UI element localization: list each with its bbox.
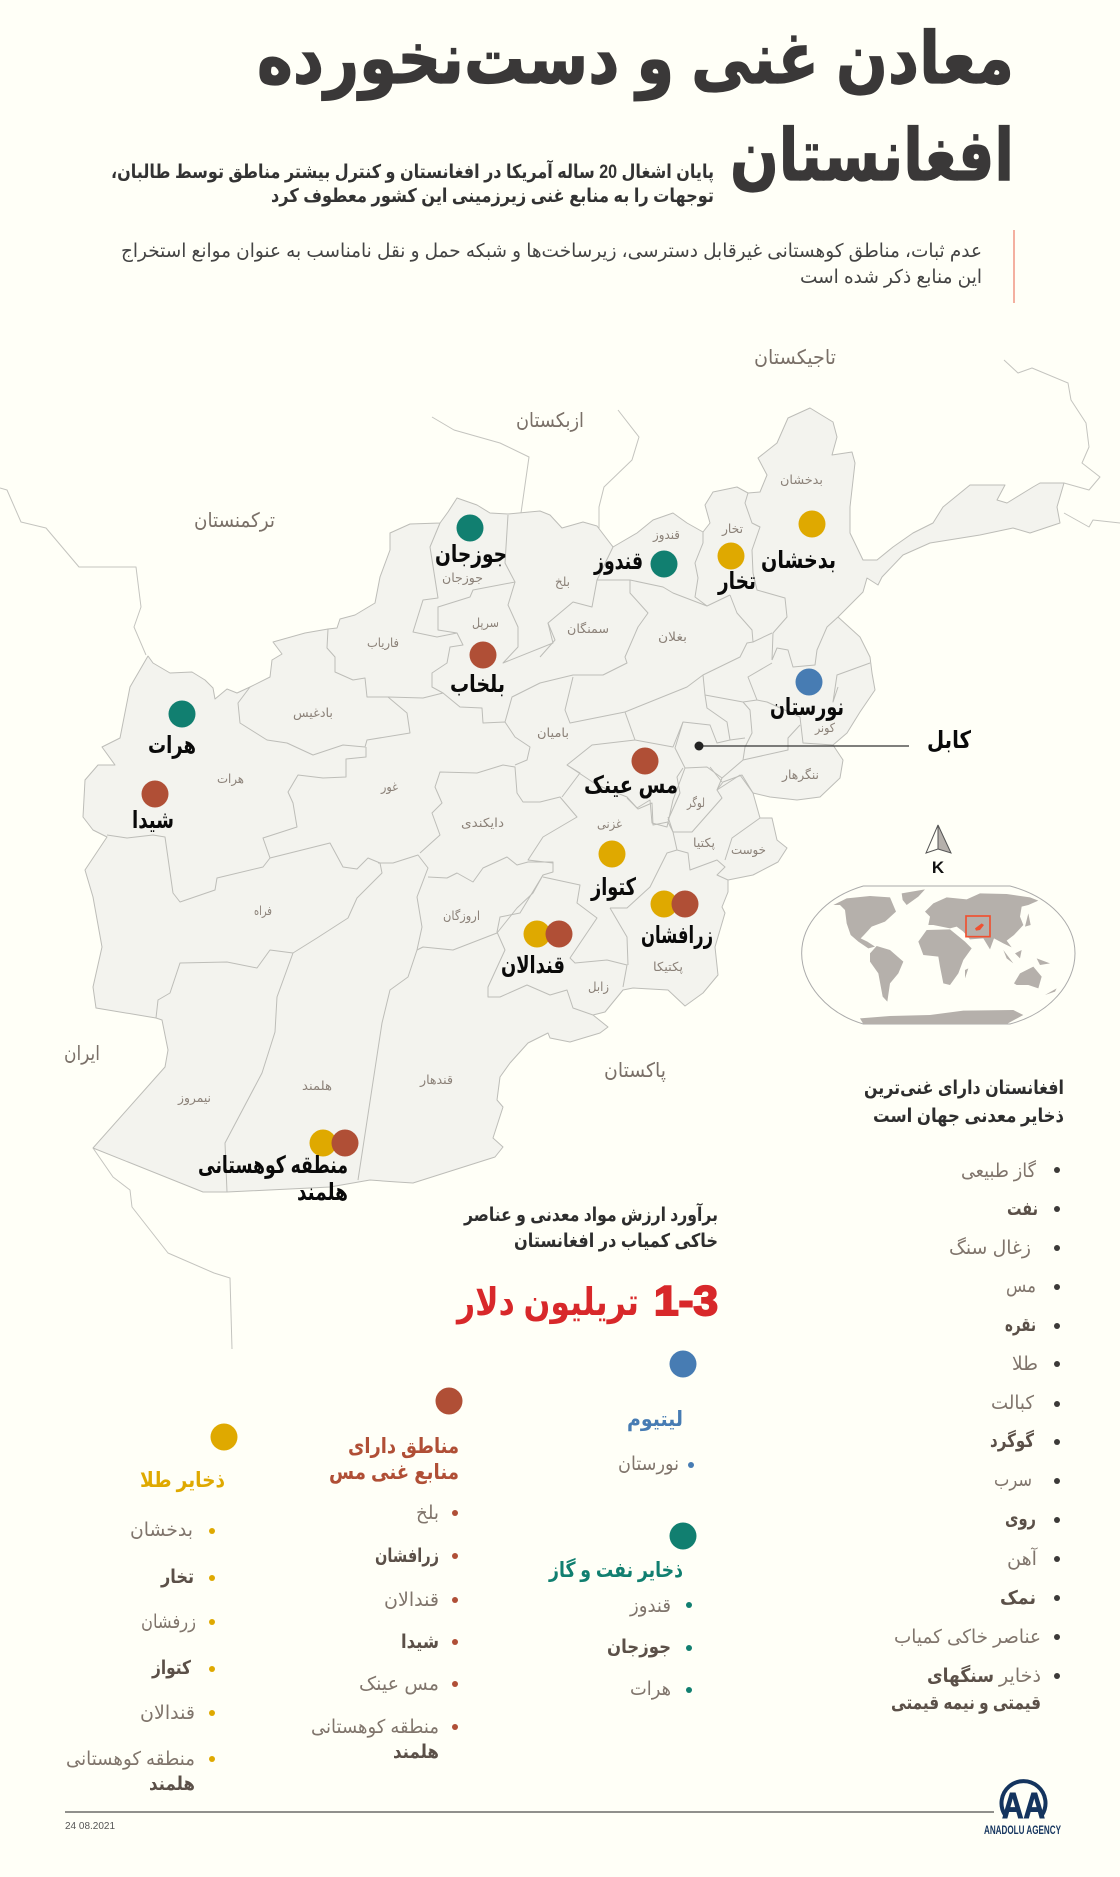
logo: Anadolu Agency bbox=[984, 1781, 1061, 1837]
icon: north arrow bbox=[926, 825, 951, 877]
marker: Helmand mountain area gold and copper: منطقه کوهستانی bbox=[198, 1152, 348, 1179]
map: province labels: تخار bbox=[721, 522, 743, 537]
marker: Balkhab copper bbox=[450, 642, 505, 698]
list: minerals: قیمتی و نیمه قیمتی bbox=[891, 1693, 1041, 1714]
marker: Helmand mountain area gold and copper: هلمند bbox=[297, 1179, 348, 1206]
map: province labels: هلمند bbox=[302, 1079, 332, 1093]
map: province labels: سمنگان bbox=[567, 621, 609, 636]
subtitle: پایان اشغال 20 ساله آمریکا در افغانستان و کنترل بیشتر مناطق توسط طالبان، bbox=[111, 159, 714, 183]
legend: copper regions: منطقه کوهستانی bbox=[311, 1717, 439, 1738]
intro text block: این منابع ذکر شده است bbox=[800, 267, 982, 288]
legend: lithium bbox=[618, 1350, 696, 1475]
marker: Katawaz gold bbox=[590, 840, 636, 901]
marker: Mes Aynak copper: مس عینک bbox=[584, 772, 678, 799]
legend: gold reserves: ذخایر طلا bbox=[140, 1469, 225, 1492]
list heading: richest reserves: افغانستان دارای غنی‌ترین bbox=[864, 1078, 1064, 1099]
list: minerals: نقره bbox=[1005, 1315, 1036, 1336]
title: افغانستان bbox=[730, 116, 1014, 196]
marker: Kunduz oil and gas: قندوز bbox=[593, 548, 643, 575]
world locator map bbox=[802, 886, 1075, 1024]
callout: estimated value bbox=[455, 1202, 718, 1324]
list: minerals: گوگرد bbox=[990, 1429, 1035, 1452]
list: minerals: گاز طبیعی bbox=[961, 1159, 1037, 1182]
map: Afghanistan outline bbox=[83, 408, 1064, 1192]
legend: gold reserves bbox=[66, 1424, 238, 1795]
map: province labels: جوزجان bbox=[442, 571, 483, 586]
legend: gold reserves: تخار bbox=[160, 1567, 194, 1588]
marker: Nuristan lithium: نورستان bbox=[770, 694, 844, 721]
marker: Helmand mountain area gold and copper bbox=[198, 1130, 358, 1206]
map: province labels: غور bbox=[380, 780, 398, 795]
title bbox=[257, 19, 1014, 196]
marker: Shida copper bbox=[132, 780, 174, 834]
marker: Balkhab copper: بلخاب bbox=[450, 671, 505, 698]
legend: oil and gas reserves: جوزجان bbox=[607, 1637, 671, 1658]
marker: Jowzjan oil and gas: جوزجان bbox=[435, 541, 507, 568]
map: neighbouring country borders bbox=[0, 360, 1120, 1349]
intro text block: عدم ثبات، مناطق کوهستانی غیرقابل دسترسی، زیرساخت‌ها و شبکه حمل و نقل نامناسب به عنوان موانع استخراج bbox=[121, 241, 982, 262]
map: province labels: خوست bbox=[731, 843, 766, 858]
list heading: richest reserves: ذخایر معدنی جهان است bbox=[873, 1106, 1064, 1127]
legend: gold reserves: منطقه کوهستانی bbox=[66, 1749, 195, 1770]
callout: estimated value: تریلیون دلار bbox=[455, 1282, 639, 1324]
icon: north arrow: K bbox=[932, 858, 945, 877]
marker: Katawaz gold: کتواز bbox=[590, 874, 636, 901]
map: province labels: نیمروز bbox=[177, 1091, 211, 1106]
intro text block bbox=[121, 230, 1014, 303]
map: province labels: بادغیس bbox=[293, 706, 333, 721]
subtitle bbox=[111, 159, 714, 207]
legend: copper regions: زرافشان bbox=[375, 1546, 439, 1567]
map: country labels: ازبکستان bbox=[516, 410, 584, 432]
map: province labels: دایکندی bbox=[461, 816, 504, 830]
legend: gold reserves: بدخشان bbox=[130, 1520, 193, 1541]
legend: gold reserves: قندالان bbox=[140, 1703, 195, 1724]
marker: Nuristan lithium bbox=[770, 668, 844, 721]
list: minerals: نمک bbox=[1000, 1588, 1036, 1609]
map: province labels: لوگر bbox=[686, 795, 705, 811]
list: minerals: طلا bbox=[1012, 1354, 1038, 1375]
map: province labels: بامیان bbox=[537, 726, 569, 740]
map: province labels: زابل bbox=[588, 980, 609, 995]
logo: Anadolu Agency: ANADOLU AGENCY bbox=[984, 1825, 1061, 1837]
list: minerals: زغال سنگ bbox=[949, 1237, 1031, 1259]
legend: copper regions: مناطق دارای bbox=[348, 1435, 459, 1458]
map: province labels: اروزگان bbox=[443, 908, 480, 924]
list: minerals: نفت bbox=[1007, 1199, 1038, 1220]
marker: Kabul capital with leader line: کابل bbox=[927, 727, 971, 754]
marker: Kabul capital with leader line bbox=[694, 727, 971, 754]
marker: Takhar gold bbox=[717, 542, 756, 595]
legend: copper regions: مس عینک bbox=[359, 1674, 439, 1695]
legend: oil and gas reserves: قندوز bbox=[629, 1596, 671, 1617]
legend: oil and gas reserves: هرات bbox=[630, 1679, 671, 1700]
map: province labels: بغلان bbox=[658, 630, 687, 644]
list heading: richest reserves bbox=[864, 1078, 1064, 1127]
map: province labels: فراه bbox=[254, 904, 272, 919]
legend: gold reserves: کتواز bbox=[151, 1658, 192, 1679]
list: minerals: آهن bbox=[1007, 1546, 1038, 1570]
map: country labels: ایران bbox=[64, 1043, 100, 1065]
marker: Badakhshan gold: بدخشان bbox=[761, 547, 836, 574]
map: country labels bbox=[64, 347, 836, 1083]
legend: copper regions: قندالان bbox=[384, 1590, 439, 1611]
marker: Shida copper: شیدا bbox=[132, 807, 174, 834]
marker: Takhar gold: تخار bbox=[717, 568, 756, 595]
marker: Herat oil and gas: هرات bbox=[148, 732, 196, 759]
legend: gold reserves: زرفشان bbox=[141, 1612, 196, 1633]
legend: copper regions: شیدا bbox=[401, 1632, 439, 1653]
subtitle: توجهات را به منابع غنی زیرزمینی این کشور معطوف کرد bbox=[271, 186, 714, 207]
marker: Zarafshan gold and copper bbox=[641, 890, 713, 949]
map: province labels: کونر bbox=[814, 721, 835, 736]
map: province labels: هرات bbox=[217, 772, 244, 787]
list: minerals: عناصر خاکی کمیاب bbox=[894, 1627, 1041, 1648]
map: province labels: قندهار bbox=[419, 1073, 453, 1088]
legend: copper regions: منابع غنی مس bbox=[329, 1461, 459, 1484]
legend: lithium: لیتیوم bbox=[627, 1408, 683, 1431]
map: province labels: پکتیکا bbox=[653, 960, 684, 974]
list: minerals: روی bbox=[1005, 1509, 1036, 1530]
map: province borders bbox=[107, 493, 870, 1192]
list: minerals: کبالت bbox=[991, 1393, 1035, 1414]
marker: Mes Aynak copper bbox=[584, 748, 678, 799]
map: province labels: بدخشان bbox=[780, 473, 823, 487]
list: minerals bbox=[891, 1159, 1060, 1714]
list: minerals: سنگهای bbox=[927, 1664, 994, 1687]
legend: copper regions bbox=[311, 1388, 462, 1763]
map: province labels: غزنی bbox=[597, 817, 622, 832]
map: province labels: قندوز bbox=[652, 528, 680, 543]
callout: estimated value: برآورد ارزش مواد معدنی و عناصر bbox=[463, 1202, 718, 1226]
callout: estimated value: خاکی کمیاب در افغانستان bbox=[514, 1231, 718, 1252]
marker: Badakhshan gold bbox=[761, 510, 836, 574]
map: province labels: بلخ bbox=[555, 575, 570, 589]
map: province labels: سرپل bbox=[472, 616, 499, 631]
legend: oil and gas reserves bbox=[548, 1522, 696, 1700]
map: province labels: ننگرهار bbox=[781, 767, 819, 783]
callout: estimated value: 1-3 bbox=[654, 1277, 718, 1324]
list: minerals: سرب bbox=[994, 1470, 1032, 1491]
map: country labels: تاجیکستان bbox=[754, 347, 836, 369]
map: province labels: فاریاب bbox=[367, 636, 399, 651]
map: country labels: ترکمنستان bbox=[194, 510, 275, 532]
map: province labels: پکتیا bbox=[693, 836, 716, 850]
logo: Anadolu Agency: AA bbox=[1002, 1785, 1045, 1826]
list: minerals: ذخایر bbox=[998, 1666, 1041, 1687]
marker: Qandalan gold and copper bbox=[501, 920, 572, 979]
legend: copper regions: هلمند bbox=[393, 1742, 439, 1763]
marker: Jowzjan oil and gas bbox=[435, 514, 507, 568]
legend: copper regions: بلخ bbox=[416, 1503, 439, 1524]
marker: Qandalan gold and copper: قندالان bbox=[501, 952, 565, 979]
marker: Zarafshan gold and copper: زرافشان bbox=[641, 922, 713, 949]
legend: lithium: نورستان bbox=[618, 1454, 679, 1475]
legend: gold reserves: هلمند bbox=[149, 1774, 195, 1795]
footer line and date: 24 08.2021 bbox=[65, 1821, 115, 1832]
list: minerals: مس bbox=[1006, 1276, 1036, 1297]
map: country labels: پاکستان bbox=[604, 1060, 666, 1083]
map: province labels bbox=[177, 473, 835, 1106]
marker: Herat oil and gas bbox=[148, 700, 196, 759]
legend: oil and gas reserves: ذخایر نفت و گاز bbox=[548, 1557, 683, 1582]
